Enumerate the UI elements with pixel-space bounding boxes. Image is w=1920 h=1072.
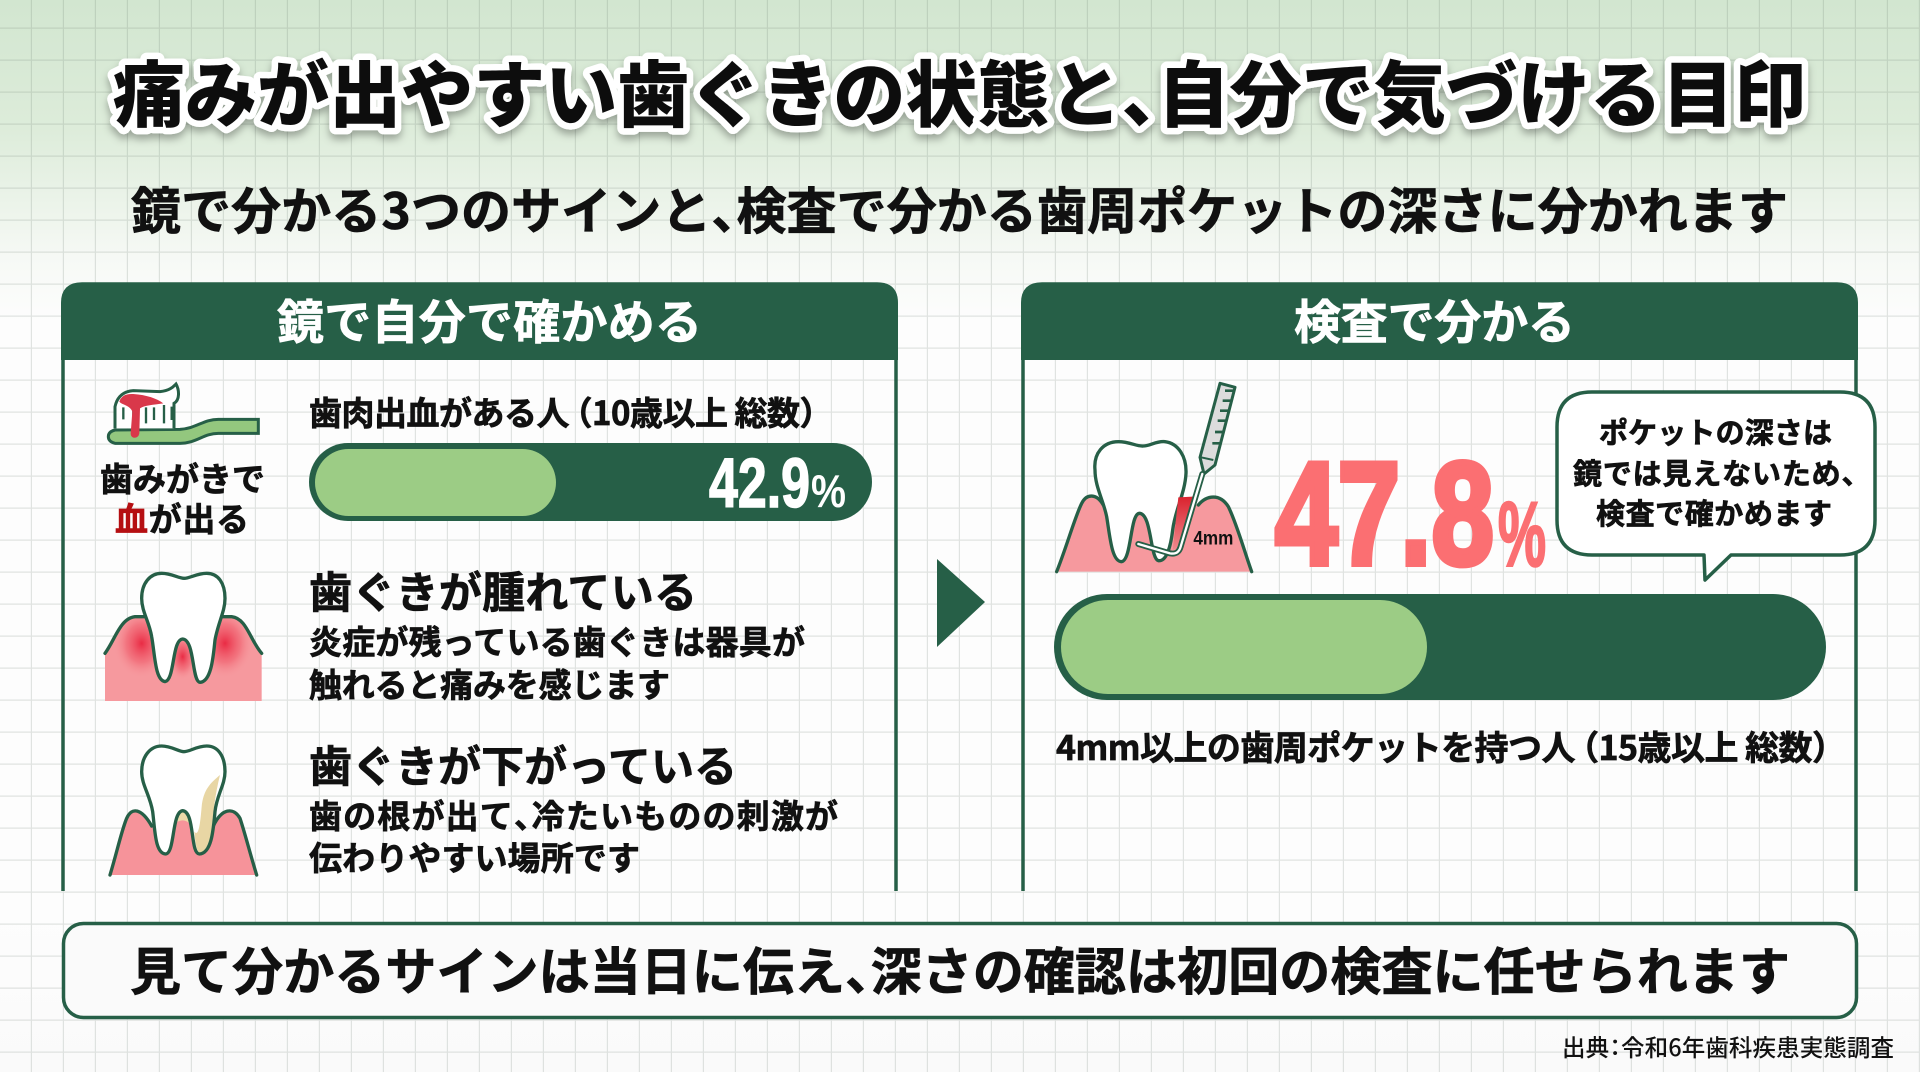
- text: receding gums: [309, 733, 838, 880]
- panel frame left: [63, 284, 896, 891]
- summary box: 見て分かるサインは当日に伝え、深さの確認は初回の検査に任せられます: [130, 931, 1790, 1005]
- icon: toothbrush with blood: [108, 384, 258, 443]
- callout: [1557, 392, 1875, 580]
- panel heading right: 検査で分かる: [1294, 284, 1575, 353]
- icon: tooth with probe: 4mm: [1193, 529, 1233, 550]
- panel header left: [61, 283, 898, 360]
- text: receding gums: 歯の根が出て、冷たいものの刺激が: [309, 790, 838, 838]
- bar: pocket 47.8%: [1054, 594, 1826, 700]
- text: brushing bleeds: [100, 453, 265, 541]
- stat: 47.8%: %: [1498, 484, 1546, 586]
- panel heading left: 鏡で自分で確かめる: [277, 284, 702, 353]
- callout: ポケットの深さは: [1599, 410, 1832, 452]
- text: swollen gums: 触れると痛みを感じます: [309, 659, 670, 707]
- panel frame right: [1023, 284, 1856, 891]
- text: receding gums: 歯ぐきが下がっている: [309, 733, 737, 795]
- arrow: [937, 559, 985, 647]
- panel: mirror self check: [61, 283, 898, 891]
- text: receding gums: 伝わりやすい場所です: [309, 832, 640, 880]
- callout: 検査で確かめます: [1596, 491, 1832, 533]
- stat: 47.8%: 47.8: [1275, 432, 1494, 595]
- icon: receding gums: [110, 746, 257, 875]
- bar: bleeding 42.9%: [309, 443, 872, 522]
- text: brushing bleeds: 血が出る: [115, 493, 249, 541]
- subtitle: 鏡で分かる3つのサインと、検査で分かる歯周ポケットの深さに分かれます: [131, 172, 1788, 244]
- icon: swollen gums: [105, 573, 262, 701]
- panel: examination: [1021, 283, 1875, 891]
- source: 出典：令和6年歯科疾患実態調査: [1562, 1029, 1894, 1063]
- panel header right: [1021, 283, 1858, 360]
- bar: bleeding 42.9%: 42.9: [709, 444, 810, 522]
- title: 痛みが出やすい歯ぐきの状態と、自分で気づける目印: [113, 37, 1806, 142]
- callout: 鏡では見えないため、: [1573, 451, 1856, 493]
- bar: bleeding 42.9%: %: [811, 465, 846, 517]
- text: swollen gums: 歯ぐきが腫れている: [309, 559, 697, 621]
- text: brushing bleeds: 歯みがきで: [100, 453, 265, 501]
- label: pocket depth: 4mm以上の歯周ポケットを持つ人 （15歳以上 総数）: [1056, 721, 1829, 770]
- text: swollen gums: [309, 559, 805, 707]
- label: bleeding gums: 歯肉出血がある人 （10歳以上 総数）: [309, 387, 816, 435]
- text: swollen gums: 炎症が残っている歯ぐきは器具が: [309, 616, 805, 664]
- icon: tooth with probe: [1057, 383, 1252, 572]
